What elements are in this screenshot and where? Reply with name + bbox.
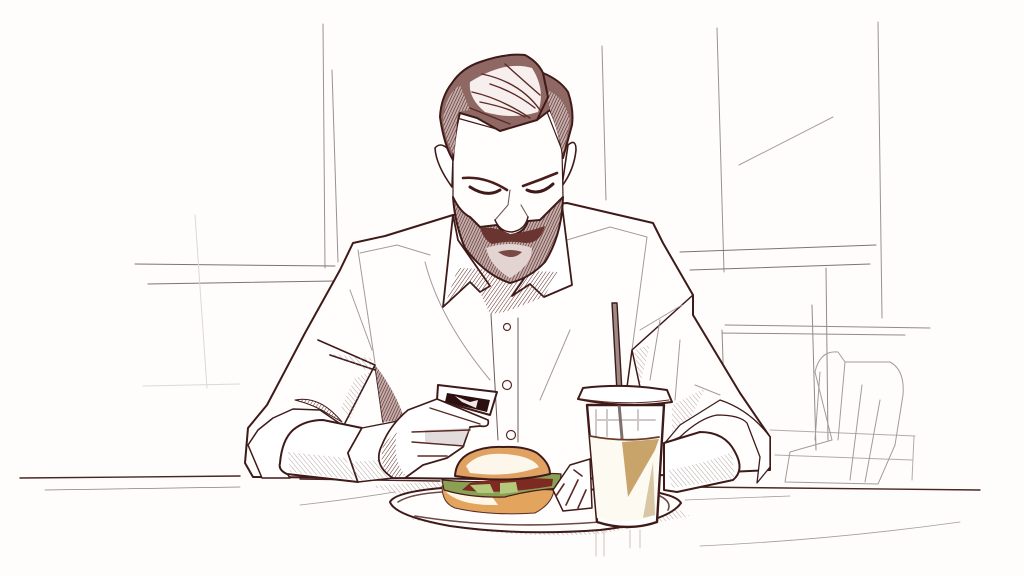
left forearm <box>280 420 362 482</box>
filling <box>442 474 561 497</box>
top bun <box>455 447 550 480</box>
ears <box>435 142 576 187</box>
shirt yoke and seam lines <box>350 227 647 400</box>
background chair sketch <box>785 352 903 484</box>
right hand <box>553 459 592 511</box>
shadow under beard <box>445 268 558 314</box>
nose <box>495 190 528 220</box>
chin beard <box>486 244 532 278</box>
straw <box>612 303 622 392</box>
hair <box>440 55 572 160</box>
left sleeve folds <box>318 340 383 423</box>
collar <box>443 205 572 307</box>
hair highlights <box>470 66 541 116</box>
table shadow <box>372 481 442 494</box>
cup lid <box>578 386 672 405</box>
straw inside <box>619 404 622 438</box>
hair part <box>537 73 548 120</box>
drink cup <box>578 303 672 527</box>
cup body <box>587 405 664 527</box>
beard <box>453 197 563 283</box>
right rolled sleeve <box>664 400 770 483</box>
plate shadow <box>405 500 690 535</box>
shirt buttons <box>502 324 516 440</box>
bottom bun <box>442 486 554 514</box>
head <box>435 55 576 283</box>
phone <box>437 385 497 415</box>
hair side hatching <box>443 85 570 155</box>
face <box>453 112 563 283</box>
right sleeve folds <box>627 295 693 387</box>
right forearm <box>664 432 740 492</box>
hair strands <box>470 64 540 124</box>
eyebrows <box>463 173 557 190</box>
plate <box>390 488 690 535</box>
hand holding phone <box>379 399 488 478</box>
eyes <box>470 184 553 193</box>
background window frames and wall lines <box>135 22 930 480</box>
left rolled sleeve <box>248 409 342 478</box>
drink <box>590 437 659 521</box>
cup inner reflections <box>596 410 655 436</box>
shirt <box>245 203 770 492</box>
button placket <box>491 314 518 442</box>
table <box>20 476 980 556</box>
moustache and mouth <box>480 226 545 244</box>
left cuff <box>348 420 403 482</box>
shirt body and sleeves <box>245 203 770 480</box>
burger <box>442 447 561 514</box>
